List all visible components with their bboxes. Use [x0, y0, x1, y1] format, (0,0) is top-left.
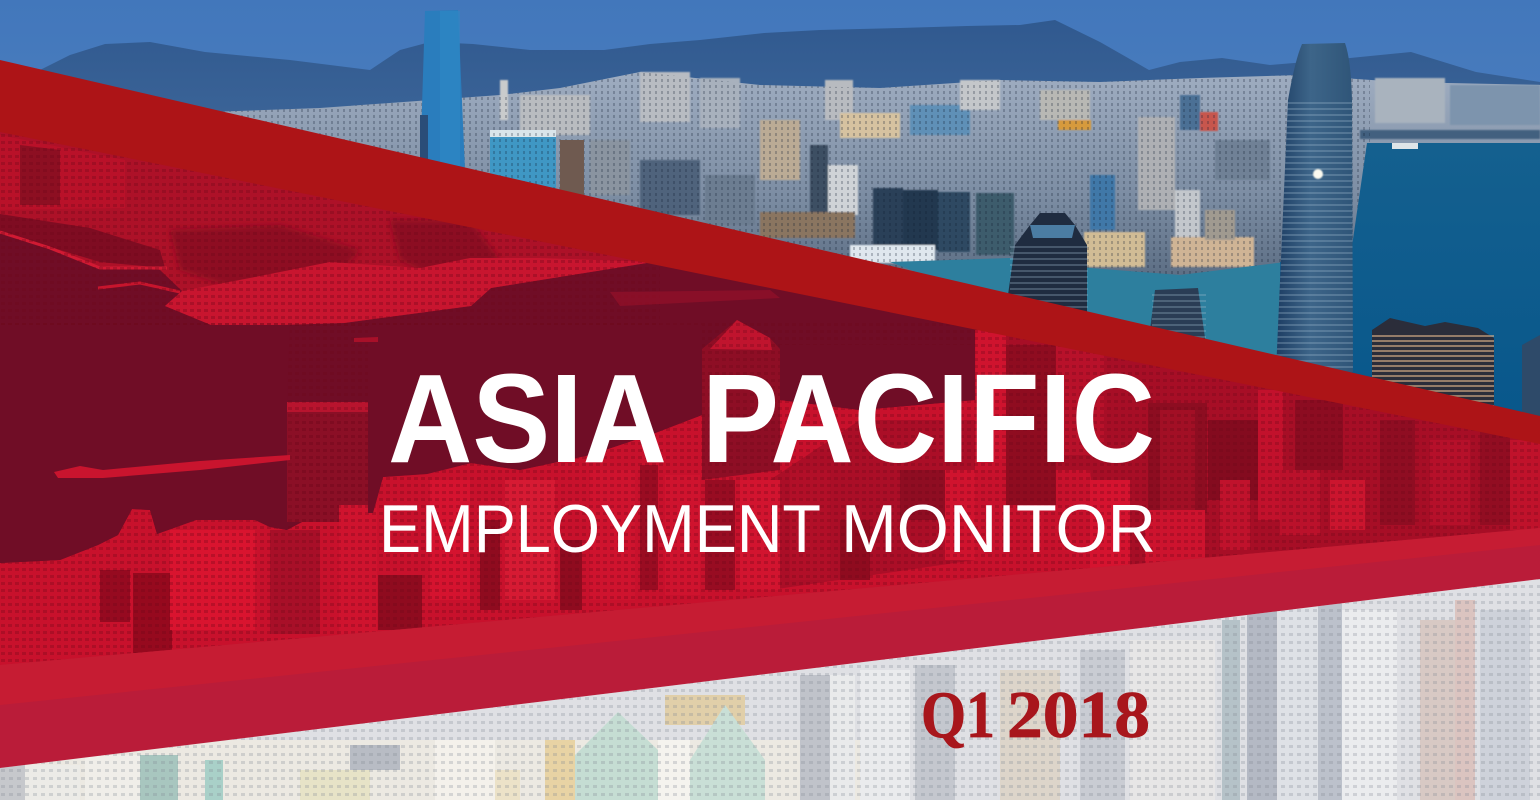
- photo: pale city strip: [0, 570, 1540, 800]
- water mask over texture: [0, 325, 290, 563]
- peninsula: [0, 130, 653, 327]
- title: [388, 348, 1155, 489]
- darker right side city: [1006, 330, 1540, 570]
- title: PACIFIC: [702, 348, 1155, 489]
- foreground towers: [1008, 213, 1540, 420]
- left towers detail: [100, 570, 130, 622]
- date label: Q1: [921, 678, 995, 752]
- subtitle: MONITOR: [841, 491, 1156, 567]
- city mass: [200, 72, 1540, 320]
- subtitle: EMPLOYMENT: [379, 491, 821, 567]
- towers: [287, 402, 368, 522]
- photo: harbour skyline: [0, 0, 1540, 460]
- IFC tower: [1276, 43, 1353, 372]
- teal building: [490, 130, 584, 200]
- date label: 2018: [1007, 678, 1150, 752]
- title: ASIA: [388, 348, 667, 489]
- sea: [1350, 143, 1540, 425]
- mountains: [40, 20, 1540, 140]
- diagonal band: lower crimson: [0, 528, 1540, 768]
- date label: [921, 678, 1150, 752]
- icon: ICC tower: [420, 10, 465, 170]
- subtitle: [379, 491, 1156, 567]
- city left skyline: [0, 330, 1091, 665]
- photo: red tinted panel: [0, 120, 1540, 680]
- diagonal band: dark red: [0, 60, 1540, 444]
- wake and ferry: [386, 463, 470, 477]
